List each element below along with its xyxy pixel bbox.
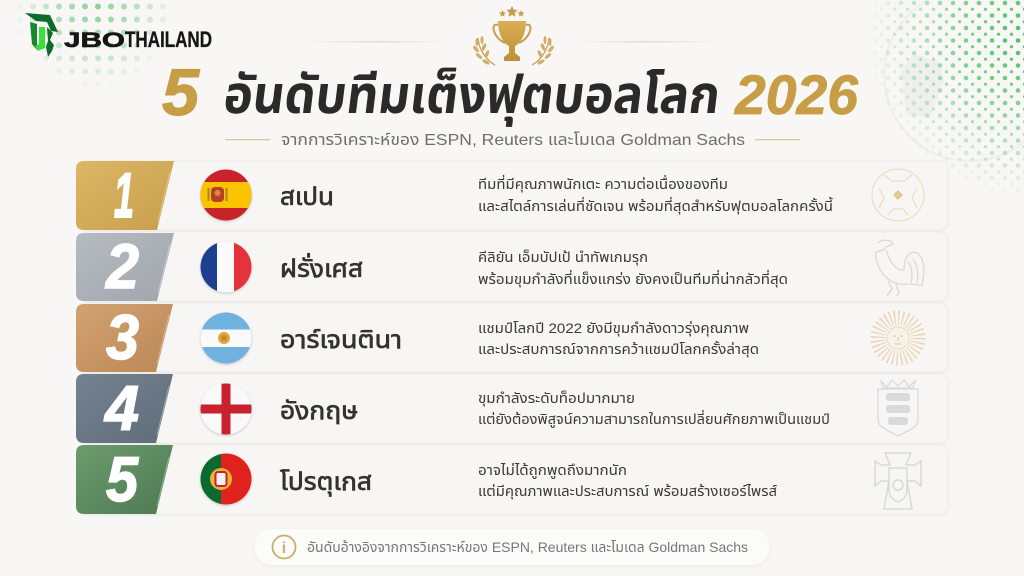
icon: Portugal crest: [875, 453, 921, 509]
panel: rank 3 Argentina: [76, 303, 948, 373]
title: อันดับทีมเต็งฟุตบอลโลก: [220, 66, 724, 127]
footer note: [254, 529, 770, 565]
country name: ฝรั่งเศส: [280, 252, 363, 283]
panel: rank 2 France: [76, 232, 948, 302]
description: [478, 390, 830, 428]
description: [478, 249, 788, 288]
rank badge 2: [76, 232, 174, 302]
description: ทีมที่มีคุณภาพนักเตะ ความต่อเนื่องของทีม: [478, 174, 728, 193]
panel: rank 1 Spain: [76, 161, 948, 231]
flag: Portugal: [200, 453, 252, 505]
flag: Argentina: [200, 312, 252, 364]
halftone dots: top right: [873, 0, 1024, 192]
country name: อังกฤษ: [280, 397, 358, 425]
panel: rank 5 Portugal: [76, 445, 948, 515]
flag: England: [200, 383, 252, 435]
rank badge 1: 1: [114, 161, 134, 231]
description: และประสบการณ์จากการคว้าแชมป์โลกครั้งล่าสุด: [478, 340, 759, 358]
description: แชมป์โลกปี 2022 ยังมีขุมกำลังดาวรุ่งคุณภาพ: [478, 320, 749, 337]
rank badge 5: [76, 445, 173, 515]
description: คีลิยัน เอ็มบัปเป้ นำทัพเกมรุก: [478, 249, 648, 266]
panel: rank 4 England: [76, 374, 948, 444]
row card: [80, 303, 948, 372]
description: แต่ยังต้องพิสูจน์ความสามารถในการเปลี่ยนศักยภาพเป็นแชมป์: [478, 409, 830, 428]
logo wordmark: JBO: [64, 29, 125, 52]
icon: logo mark: [25, 13, 58, 57]
logo: [25, 13, 212, 57]
rank badge 2: 2: [105, 232, 139, 302]
description: แต่มีคุณภาพและประสบการณ์ พร้อมสร้างเซอร์ไพรส์: [478, 483, 777, 500]
description: [478, 462, 777, 500]
description: ขุมกำลังระดับท็อปมากมาย: [478, 390, 635, 407]
row card: [80, 232, 948, 301]
icon: England crest: [878, 380, 918, 436]
rank badge 4: 4: [103, 374, 139, 444]
title: 2026: [734, 63, 859, 126]
rank badge 3: [76, 303, 173, 373]
footer text: อันดับอ้างอิงจากการวิเคราะห์ของ ESPN, Reuters และโมเดล Goldman Sachs: [307, 539, 748, 555]
row card: [80, 445, 948, 514]
country name: สเปน: [280, 183, 334, 211]
icon: info: i: [282, 540, 286, 557]
logo wordmark: THAILAND: [125, 27, 212, 52]
icon: football outline: [872, 169, 924, 221]
icon: trophy with stars and laurels: [472, 6, 555, 65]
subtitle: จากการวิเคราะห์ของ ESPN, Reuters และโมเดล Goldman Sachs: [281, 132, 745, 149]
description: [478, 320, 759, 358]
rank badge 3: 3: [106, 303, 139, 373]
title: [162, 55, 859, 129]
row card: [80, 374, 948, 443]
country name: โปรตุเกส: [280, 468, 372, 497]
faint football: top right: [884, 0, 1024, 161]
icon: sun of May: [878, 318, 918, 358]
title: 5: [162, 55, 200, 129]
description: พร้อมขุมกำลังที่แข็งแกร่ง ยังคงเป็นทีมที่น่ากลัวที่สุด: [478, 269, 788, 288]
description: [478, 174, 833, 215]
decorative rules beside trophy: [305, 41, 450, 42]
rank badge 1: [76, 161, 174, 231]
country name: อาร์เจนตินา: [280, 326, 402, 354]
description: และสไตล์การเล่นที่ชัดเจน พร้อมที่สุดสำหรับฟุตบอลโลกครั้งนี้: [478, 196, 833, 215]
rank badge 4: [76, 374, 173, 444]
description: อาจไม่ได้ถูกพูดถึงมากนัก: [478, 462, 627, 479]
rank badge 5: 5: [106, 445, 139, 515]
halftone dots: top left: [18, 4, 166, 85]
logo wordmark: [64, 27, 212, 52]
icon: info: [272, 536, 296, 558]
icon: rooster: [876, 240, 924, 296]
row card: [80, 161, 948, 230]
flag: France: [200, 241, 252, 293]
flag: Spain: [200, 169, 252, 221]
